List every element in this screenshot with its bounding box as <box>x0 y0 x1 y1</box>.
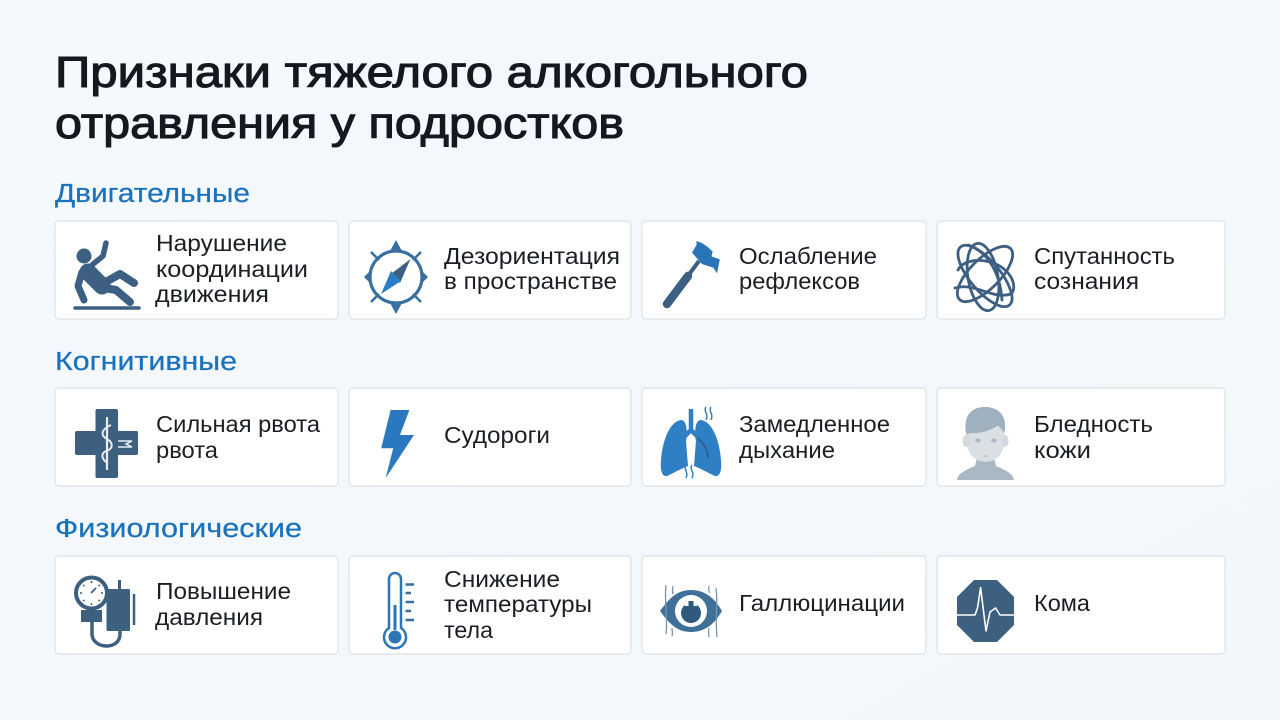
panel: Повышение давления <box>55 556 338 654</box>
text: Дезориентация в пространстве: Дезориентация <box>444 243 620 269</box>
icon: thermometer <box>384 573 414 648</box>
text: Спутанность сознания: сознания <box>1034 268 1139 294</box>
text: Снижение температуры тела: Снижение <box>444 566 560 592</box>
text: Нарушение координации движения <box>155 230 308 307</box>
text: Нарушение координации движения: движения <box>155 281 269 307</box>
title: Признаки тяжелого алкогольного <box>55 48 808 97</box>
panel: Ослабление рефлексов <box>642 221 926 319</box>
icon: tangled lines <box>949 237 1021 315</box>
text: Спутанность сознания <box>1034 243 1175 294</box>
text: Сильная рвота рвота: Сильная рвота <box>156 411 320 437</box>
icon: reflex hammer <box>667 241 720 304</box>
text: Дезориентация в пространстве <box>444 243 620 294</box>
text: Снижение температуры тела: температуры <box>444 591 592 617</box>
text: Бледность кожи: Бледность <box>1034 411 1153 437</box>
text: Спутанность сознания: Спутанность <box>1034 243 1175 269</box>
heading: Двигательные: Двигательные <box>55 180 250 208</box>
icon: lungs <box>661 407 721 478</box>
panel: Нарушение координации движения <box>55 221 338 319</box>
icon: octagon with ECG <box>957 580 1014 642</box>
text: Сильная рвота рвота <box>156 411 320 463</box>
panel: Спутанность сознания <box>937 221 1225 319</box>
icon: pale face <box>957 407 1014 480</box>
text: Кома: Кома <box>1034 590 1090 616</box>
text: Сильная рвота рвота: рвота <box>156 437 218 463</box>
icon: blood pressure monitor <box>76 578 134 646</box>
text: Галлюцинации: Галлюцинации <box>739 590 905 616</box>
heading: Когнитивные: Когнитивные <box>55 348 237 376</box>
icon: falling person <box>75 243 139 308</box>
panel: Замедленное дыхание <box>642 388 926 486</box>
text: Бледность кожи: кожи <box>1034 437 1091 463</box>
text: Ослабление рефлексов <box>739 243 877 294</box>
text: Дезориентация в пространстве: в пространстве <box>444 268 617 294</box>
icon: lightning bolt <box>381 410 414 478</box>
text: Повышение давления <box>155 578 291 630</box>
panel: Галлюцинации <box>642 556 926 654</box>
text: Судороги: Судороги <box>444 422 550 448</box>
icon: medical cross <box>75 409 138 478</box>
icon: compass <box>364 240 428 314</box>
text: Замедленное дыхание: дыхание <box>739 437 835 463</box>
text: Снижение температуры тела <box>444 566 592 643</box>
panel: Дезориентация в пространстве <box>349 221 631 319</box>
text: Нарушение координации движения: координации <box>156 256 308 282</box>
text: Ослабление рефлексов: Ослабление <box>739 243 877 269</box>
text: Снижение температуры тела: тела <box>444 617 493 643</box>
panel: Кома <box>937 556 1225 654</box>
panel: Сильная рвота <box>55 388 338 486</box>
panel: Снижение температуры тела <box>349 556 631 654</box>
text: Нарушение координации движения: Нарушение <box>156 230 287 256</box>
panel: Судороги <box>349 388 631 486</box>
title: отравления у подростков <box>55 99 624 148</box>
text: Повышение давления: давления <box>155 604 263 630</box>
text: Бледность кожи <box>1034 411 1153 463</box>
text: Повышение давления: Повышение <box>156 578 291 604</box>
text: Замедленное дыхание <box>739 411 890 463</box>
icon: eye <box>660 585 722 637</box>
panel: Бледность кожи <box>937 388 1225 486</box>
title <box>55 48 808 148</box>
text: Ослабление рефлексов: рефлексов <box>739 268 860 294</box>
heading: Физиологические: Физиологические <box>55 515 302 543</box>
text: Замедленное дыхание: Замедленное <box>739 411 890 437</box>
